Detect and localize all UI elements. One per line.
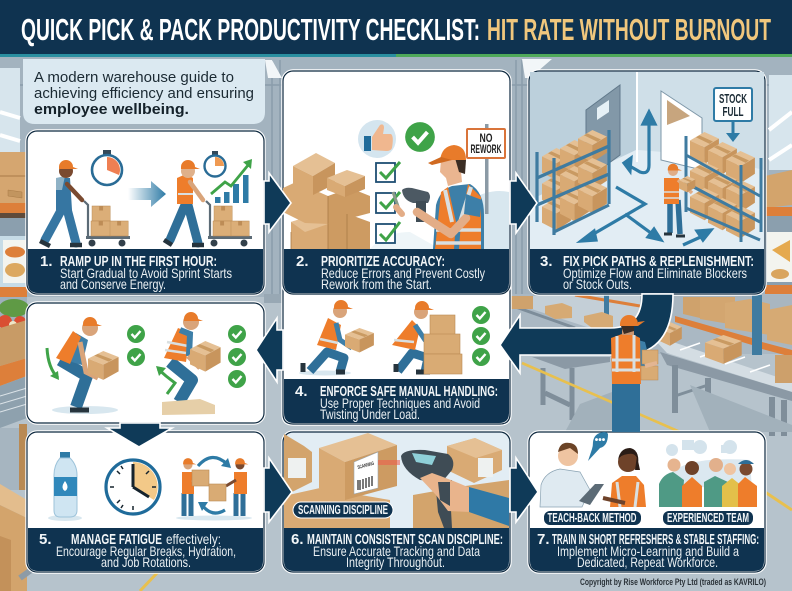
caption: Twisting Under Load.: [320, 407, 420, 422]
caption: [28, 528, 263, 571]
illustration: slow start worker with cart: [40, 160, 130, 246]
caption: [284, 528, 509, 571]
panel: step 7 training and staffing: [529, 432, 765, 572]
sign: no rework: [467, 124, 505, 214]
right storage rack with cartons: [686, 132, 761, 242]
caption: [28, 249, 263, 293]
intro text panel: achieving efficiency and ensuring: [34, 85, 254, 102]
icon: job rotation workers: [176, 457, 252, 520]
illustration: stacked cartons: [283, 153, 509, 249]
icon: rising bar chart: [211, 159, 252, 203]
caption: MAINTAIN CONSISTENT SCAN DISCIPLINE:: [307, 532, 503, 548]
checklist: [376, 162, 400, 243]
caption: 3.: [540, 253, 553, 270]
illustration: worker with scanner: [393, 145, 484, 249]
figure: lifting with knees: [156, 312, 221, 415]
figure: stacking cartons: [392, 301, 462, 374]
arrow: step 4 to safe lifting panel: [256, 318, 283, 382]
icon: wall clock: [106, 460, 160, 514]
arrow: step 6 to step 7: [510, 458, 538, 522]
icon: water bottle: [48, 452, 82, 521]
panel: step 1 ramp up: [27, 131, 264, 294]
caption: Optimize Flow and Eliminate Blockers: [563, 266, 747, 281]
caption: Integrity Throughout.: [346, 555, 445, 570]
label: teach-back method: TEACH-BACK METHOD: [548, 511, 636, 525]
caption: Reduce Errors and Prevent Costly: [321, 266, 485, 281]
icon: large stopwatch: [92, 150, 122, 185]
caption: PRIORITIZE ACCURACY:: [321, 254, 445, 270]
caption: 4.: [295, 383, 308, 400]
panel: step 5 manage fatigue: [27, 432, 264, 572]
illustration: experienced team: [659, 440, 757, 507]
intro text panel: employee wellbeing.: [34, 101, 189, 118]
arrow: step 3 to step 4: [500, 294, 673, 373]
intro text panel: A modern warehouse guide to: [34, 69, 234, 86]
illustration: handheld scanner: [401, 450, 509, 528]
caption: Ensure Accurate Tracking and Data: [313, 544, 480, 559]
arrow: step 1 to step 2: [264, 173, 291, 232]
figure: squatting lift: [47, 317, 119, 414]
caption: [284, 249, 509, 293]
caption: [284, 379, 509, 423]
flow arrows on the floor: [581, 112, 711, 245]
panel: step 4 safe manual handling: [283, 286, 510, 424]
caption: 5.: [39, 531, 52, 548]
caption: Rework from the Start.: [321, 277, 432, 292]
caption: Start Gradual to Avoid Sprint Starts: [60, 266, 232, 281]
illustration: teach-back pair: •••: [595, 435, 606, 446]
caption: Use Proper Techniques and Avoid: [320, 396, 480, 411]
caption: 7.: [537, 531, 550, 548]
icons: check badges: [472, 306, 490, 366]
icon: green check badge: [405, 122, 435, 152]
caption: 6.: [291, 531, 304, 548]
illustration: labelled cartons: [284, 433, 509, 528]
arrow: step 2 to step 3: [510, 173, 537, 233]
caption: ENFORCE SAFE MANUAL HANDLING:: [320, 384, 498, 400]
caption: 2.: [296, 253, 309, 270]
caption: Encourage Regular Breaks, Hydration,: [56, 544, 236, 559]
icon: thumbs up: [358, 120, 396, 158]
panel: step 2 accuracy: [283, 71, 510, 294]
label: scanning discipline: SCANNING DISCIPLINE: [298, 503, 388, 517]
caption: [530, 528, 764, 571]
label: experienced team: EXPERIENCED TEAM: [667, 511, 749, 525]
label: teach-back method: [544, 511, 641, 525]
illustration: labelled cartons: SCANNING: [357, 461, 375, 471]
title banner: QUICK PICK & PACK PRODUCTIVITY CHECKLIST:: [21, 12, 480, 47]
arrow: progress: [128, 181, 166, 207]
intro text panel: [23, 59, 265, 124]
illustration: teach-back pair: [540, 432, 646, 507]
sign: no rework: NO: [480, 133, 493, 145]
icons: check badges: [127, 325, 246, 388]
left storage rack with cartons: [537, 130, 609, 235]
sign: stock full: [714, 88, 752, 142]
caption: and Job Rotations.: [101, 555, 191, 570]
arrow: step 5 to step 6: [264, 458, 292, 522]
caption: Dedicated, Repeat Workforce.: [577, 555, 718, 570]
main worker on the conveyor floor: [611, 315, 658, 432]
panel: safe lifting illustration: [27, 303, 264, 423]
caption: and Conserve Energy.: [60, 277, 166, 292]
caption: [530, 249, 764, 293]
illustration: steady worker with cart: [164, 160, 252, 246]
warehouse room walls: [530, 72, 764, 200]
caption: Implement Micro-Learning and Build a: [557, 544, 739, 559]
caption: 1.: [40, 253, 53, 270]
picker with carton: [664, 164, 695, 236]
caption: RAMP UP IN THE FIRST HOUR:: [60, 254, 217, 270]
caption: or Stock Outs.: [563, 277, 632, 292]
caption: MANAGE FATIGUE: [71, 532, 162, 548]
label: experienced team: [663, 511, 753, 525]
panel: step 3 pick paths: [529, 71, 765, 294]
caption: effectively:: [166, 532, 221, 547]
label: scanning discipline: [293, 502, 393, 518]
title banner: [0, 0, 792, 57]
panel: step 6 scan discipline: [283, 432, 510, 572]
sign: stock full: STOCK: [719, 92, 747, 106]
icon: small stopwatch: [204, 151, 226, 176]
sign: no rework: REWORK: [470, 144, 502, 156]
sign: stock full: FULL: [722, 105, 744, 119]
figure: kneeling lift: [299, 300, 374, 376]
arrow: safe lifting panel down to step 5: [107, 423, 172, 447]
